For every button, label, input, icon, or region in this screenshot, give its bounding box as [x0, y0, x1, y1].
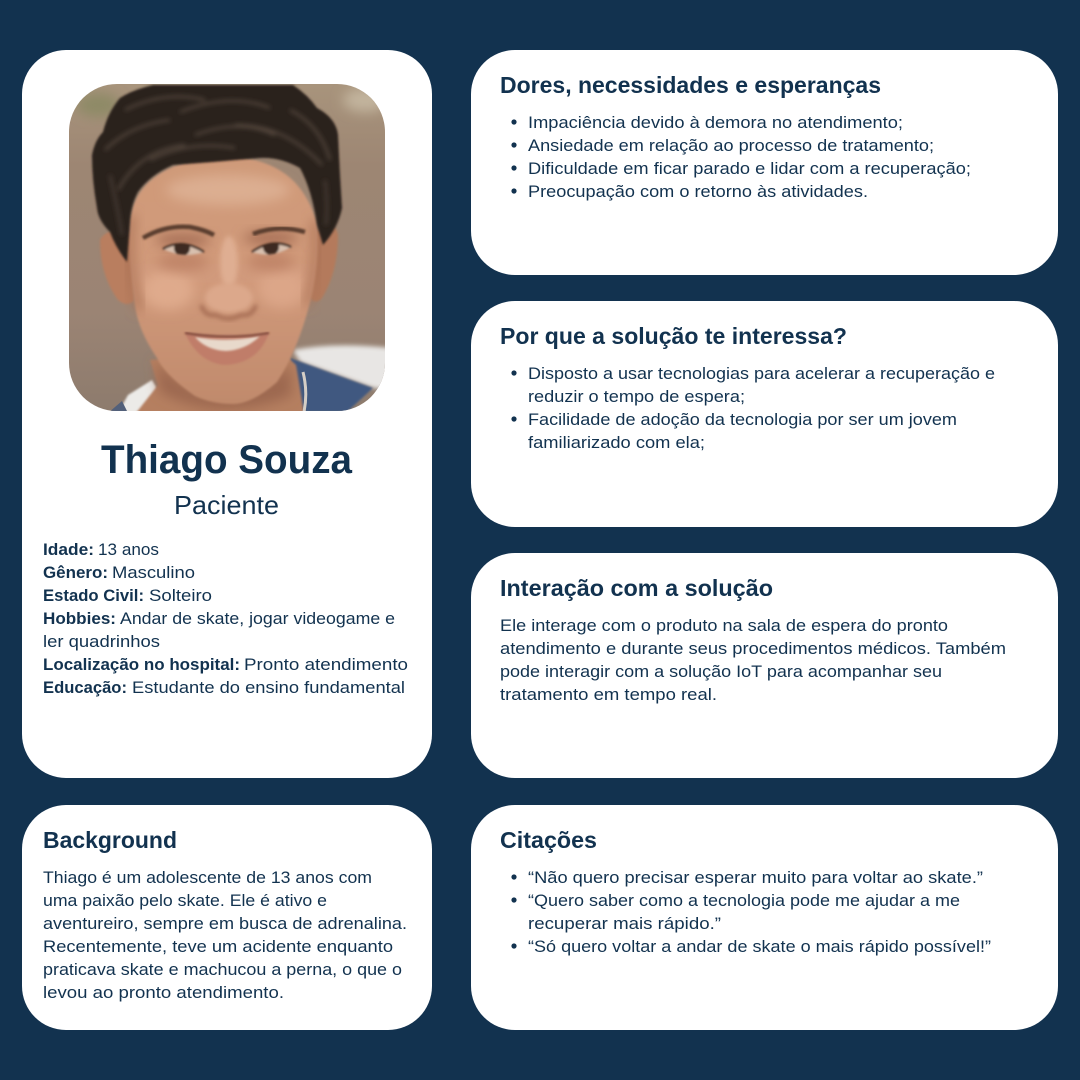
panel: interest [471, 301, 1058, 527]
quotes list: recuperar mais rápido.” [528, 914, 721, 933]
panel: pains [471, 50, 1058, 275]
nose [205, 283, 253, 313]
role: Paciente [174, 490, 279, 520]
panel: quotes [471, 805, 1058, 1030]
quotes list: “Quero saber como a tecnologia pode me ajudar a me [528, 891, 960, 910]
background text: Thiago é um adolescente de 13 anos com [43, 868, 372, 887]
profile details: Educação: [43, 678, 127, 697]
profile details: 13 anos [98, 540, 159, 559]
quotes list: “Só quero voltar a andar de skate o mais rápido possível!” [528, 937, 991, 956]
pains list: Ansiedade em relação ao processo de tratamento; [528, 136, 934, 155]
profile details: Hobbies: [43, 609, 116, 628]
profile details: Masculino [112, 563, 195, 582]
right ear [310, 226, 338, 302]
heading: interest: Por que a solução te interessa? [500, 323, 847, 349]
profile details: Idade: [43, 540, 94, 559]
quotes list: “Não quero precisar esperar muito para voltar ao skate.” [528, 868, 983, 887]
pains list: Impaciência devido à demora no atendimento; [528, 113, 903, 132]
eyes [163, 239, 291, 256]
profile details: Andar de skate, jogar videogame e [120, 609, 395, 628]
panel: profile [22, 50, 432, 778]
heading: background: Background [43, 827, 177, 853]
background text: uma paixão pelo skate. Ele é ativo e [43, 891, 327, 910]
pains list: Preocupação com o retorno às atividades. [528, 182, 868, 201]
interest list [511, 364, 995, 452]
pains list [511, 113, 971, 201]
interaction text: pode interagir com a solução IoT para acompanhar seu [500, 662, 942, 681]
profile details: Pronto atendimento [244, 655, 408, 674]
profile details: Solteiro [149, 586, 212, 605]
hair [92, 85, 342, 262]
interest list: Disposto a usar tecnologias para acelerar a recuperação e [528, 364, 995, 383]
eyebrows [143, 227, 214, 238]
background text [43, 868, 407, 1002]
interaction text: Ele interage com o produto na sala de espera do pronto [500, 616, 948, 635]
background text: levou ao pronto atendimento. [43, 983, 284, 1002]
heading: quotes: Citações [500, 827, 597, 853]
background text: aventureiro, sempre em busca de adrenalina. [43, 914, 407, 933]
heading: pains: Dores, necessidades e esperanças [500, 72, 881, 98]
profile details: Estado Civil: [43, 586, 144, 605]
name: Thiago Souza [101, 438, 353, 482]
interaction text: tratamento em tempo real. [500, 685, 717, 704]
heading: interaction: Interação com a solução [500, 575, 773, 601]
mouth [185, 333, 269, 365]
pains list: Dificuldade em ficar parado e lidar com a recuperação; [528, 159, 971, 178]
interest list: Facilidade de adoção da tecnologia por ser um jovem [528, 410, 957, 429]
portrait photo [69, 84, 390, 413]
profile details: ler quadrinhos [43, 632, 160, 651]
profile details: Estudante do ensino fundamental [132, 678, 405, 697]
profile details: Localização no hospital: [43, 655, 240, 674]
profile details [43, 540, 408, 697]
interaction text [500, 616, 1006, 704]
interest list: reduzir o tempo de espera; [528, 387, 745, 406]
quotes list [511, 868, 991, 956]
left ear [100, 231, 134, 304]
background text: praticava skate e machucou a perna, o que o [43, 960, 402, 979]
background text: Recentemente, teve um acidente enquanto [43, 937, 393, 956]
face [130, 156, 318, 404]
panel: interaction [471, 553, 1058, 778]
interaction text: atendimento e durante seus procedimentos médicos. Também [500, 639, 1006, 658]
interest list: familiarizado com ela; [528, 433, 705, 452]
panel: background [22, 805, 432, 1030]
profile details: Gênero: [43, 563, 108, 582]
